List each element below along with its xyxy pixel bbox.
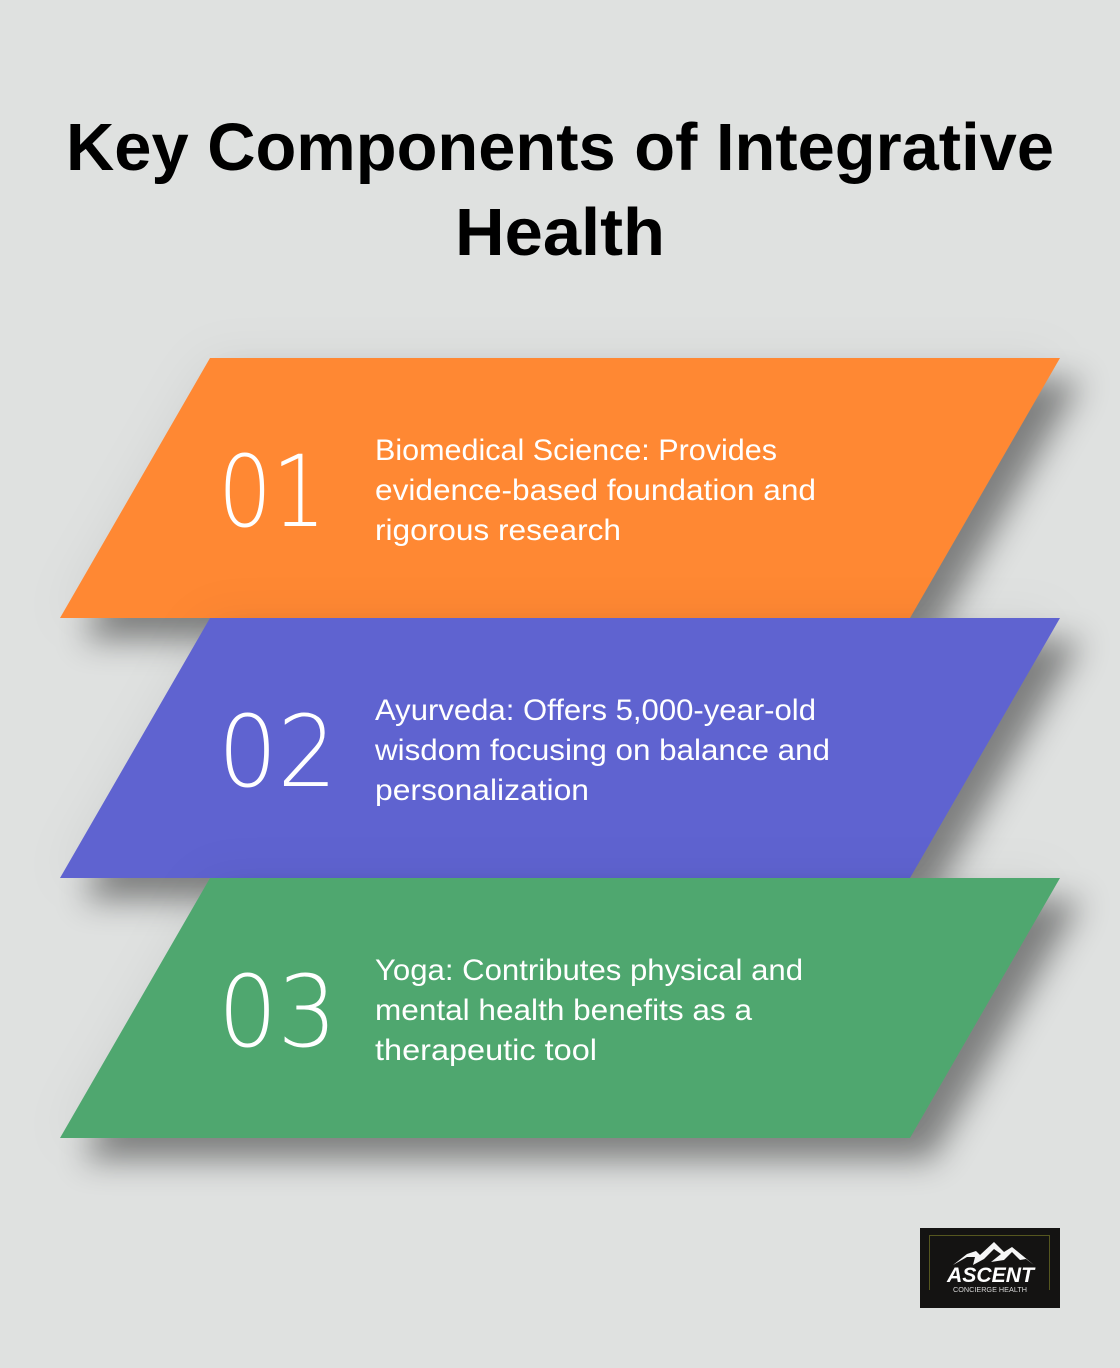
panel: 01 biomedical science [60,358,1060,618]
text: biomedical science: rigorous research [375,514,621,547]
title: Key Components of Integrative [66,110,1054,185]
orange parallelogram [60,358,1060,618]
text: ayurveda [374,694,830,807]
text: biomedical science [375,434,816,547]
logo: Ascent Concierge Health: CONCIERGE HEALTH [953,1287,1027,1294]
purple parallelogram [60,618,1060,878]
title [66,110,1054,270]
title: Health [455,195,665,270]
text: ayurveda: Ayurveda: Offers 5,000-year-old [375,694,816,727]
text: ayurveda: wisdom focusing on balance and [374,734,830,767]
text: biomedical science: evidence-based foundation and [375,474,816,507]
text: yoga: Yoga: Contributes physical and [375,954,803,987]
text: yoga [375,954,803,1067]
green parallelogram [60,878,1060,1138]
text: yoga: therapeutic tool [375,1034,597,1067]
icon: mountains [953,1242,1034,1265]
number 01: 01 [218,435,326,550]
number 03: 03 [218,955,337,1070]
text: ayurveda: personalization [375,774,589,807]
panel: 02 ayurveda [60,618,1060,878]
text: yoga: mental health benefits as a [375,994,752,1027]
logo: Ascent Concierge Health [920,1228,1060,1308]
text: biomedical science: Biomedical Science: Provides [375,434,777,467]
number 02: 02 [218,695,337,810]
panel: 03 yoga [60,878,1060,1138]
logo: Ascent Concierge Health: ASCENT [946,1264,1036,1287]
